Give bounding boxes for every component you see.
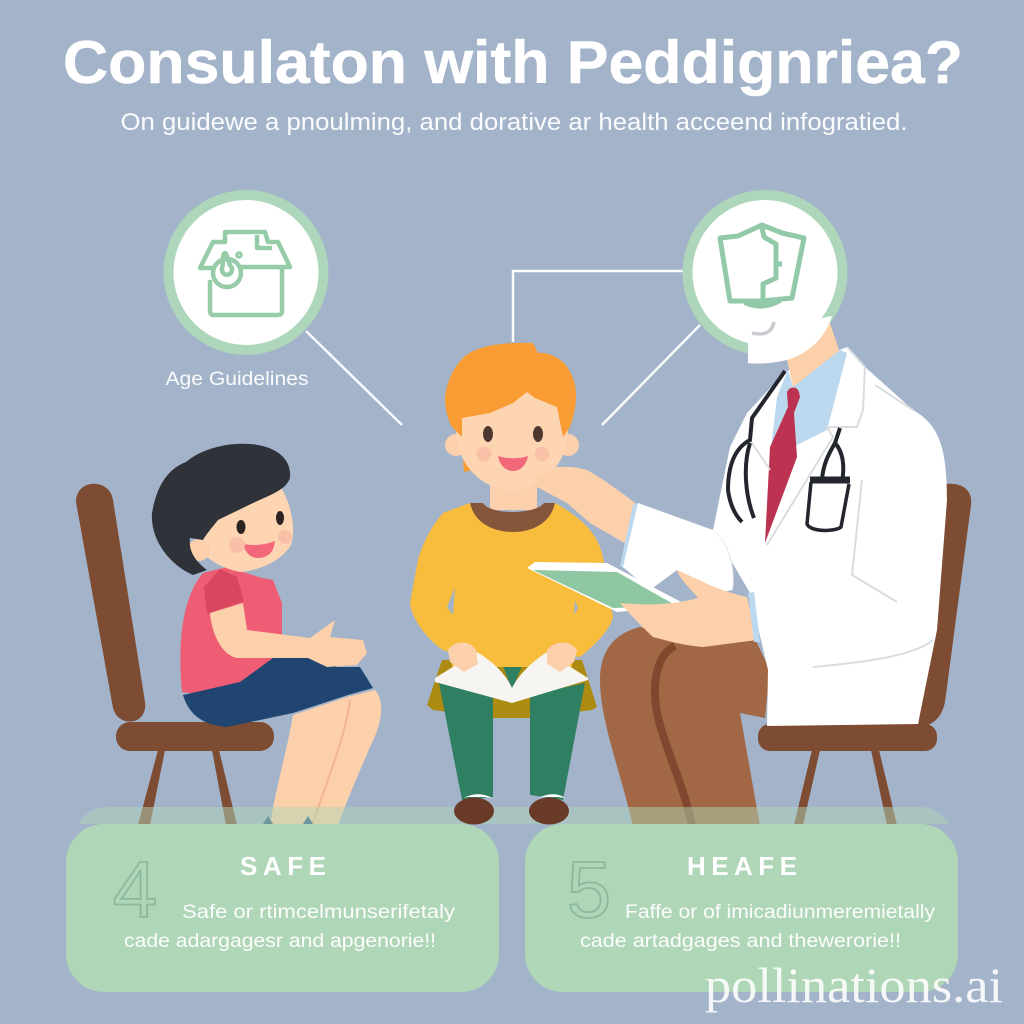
legs [270,690,381,826]
arm [210,603,367,667]
stethoscope [728,371,850,530]
skirt [427,660,597,718]
smile [752,322,774,334]
eyes and mouth [483,426,493,442]
coat body [713,347,947,726]
shirt [770,350,847,457]
ear [188,539,210,561]
child in yellow [410,343,613,800]
hair [152,444,290,575]
heading: HEAFE [687,851,797,881]
heading: SAFE [240,851,326,881]
shorts [183,658,373,727]
tie [765,388,800,543]
sleeve cuff [620,503,638,570]
hair [445,343,576,437]
sweater [410,503,613,657]
lapel shading [712,347,933,667]
doctor [527,316,947,826]
shirt [180,567,282,695]
left chair [76,484,274,825]
subtitle: On guidewe a pnoulming, and dorative ar health acceend infogratied. [120,109,908,136]
icon: age guidelines house [168,195,324,350]
panel shadow band [78,807,950,824]
eyes and mouth [236,520,246,534]
number 5: 5 [567,845,611,934]
number 4: 4 [113,845,157,934]
panel: heafe: cade artadgages and thewerorie!! [580,931,901,952]
shoes [454,794,569,824]
panel: heafe [525,824,958,992]
clipboard [527,562,687,612]
panel: safe [66,824,499,992]
trousers [600,627,770,826]
feet [263,816,313,824]
hands [448,642,478,672]
upper hand on chin [533,467,640,545]
sleeve [204,569,244,614]
hair tail [463,460,473,472]
label: age guidelines: Age Guidelines [166,369,308,390]
open book [435,652,588,703]
trousers [439,683,585,800]
ears [445,434,467,456]
sleeve [623,503,733,597]
head [195,486,293,572]
body text: Safe or rtimcelmunserifetaly [182,902,456,923]
face [748,316,832,364]
lower cuff [748,592,760,642]
right chair [758,484,971,825]
collar [470,503,555,532]
title: Consulaton with Peddignriea? [63,29,963,96]
icon: shield document [688,195,842,350]
neck [490,480,537,510]
lower hand [620,570,757,647]
neck [787,323,840,387]
child in red [152,444,381,826]
trouser seam [655,646,692,826]
body text: Faffe or of imicadiunmeremietally [625,902,936,923]
watermark: pollinations.ai [705,957,1003,1013]
panel: safe: cade adargagesr and apgenorie!! [124,931,436,952]
head [456,370,568,490]
connector lines [306,271,700,425]
